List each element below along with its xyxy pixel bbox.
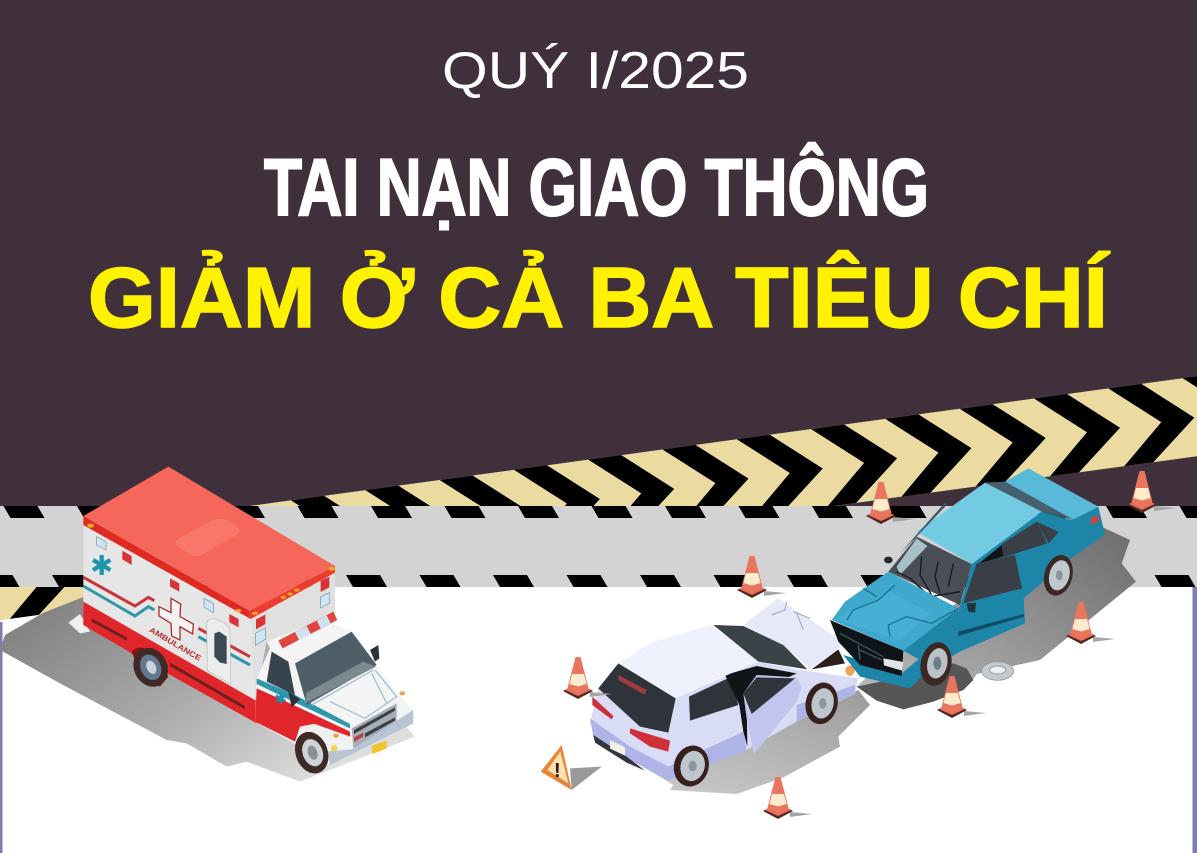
cab white base (255, 620, 413, 765)
small windows and lights (97, 537, 239, 627)
windshield (295, 632, 377, 705)
grille bars (840, 633, 883, 660)
tail lights (592, 697, 670, 752)
side window (267, 652, 295, 695)
open door (953, 555, 1025, 651)
ambulance body side (83, 525, 257, 722)
warning triangle (541, 745, 572, 790)
rear door (207, 619, 231, 684)
rear wheel (669, 742, 713, 790)
amber roof lights (87, 524, 335, 615)
icon: crashed blue car (830, 468, 1136, 709)
warning triangle shadow (570, 767, 602, 790)
roof (618, 625, 758, 697)
icon: traffic cones (563, 471, 1176, 819)
front wheel (289, 727, 334, 778)
fender (295, 724, 352, 763)
front wall lights (255, 577, 329, 645)
front lower teal lip (843, 655, 922, 688)
hood (832, 572, 958, 651)
grey road with black dashes (0, 506, 1197, 587)
headlight (883, 658, 903, 671)
engine dark gap (812, 649, 845, 669)
tail light (1091, 515, 1098, 525)
windshield (713, 625, 807, 669)
ambulance text: AMBULANCE (148, 625, 203, 663)
background: white lower ground (0, 587, 1197, 853)
front blackout (830, 620, 903, 676)
heading: yellow title line: GIẢM Ở CẢ BA TIÊU CHÍ (88, 250, 1110, 346)
side window (689, 677, 738, 721)
door window (743, 677, 795, 714)
roof hatch (175, 519, 240, 556)
dark front shadow (857, 663, 973, 709)
side stripes (83, 577, 250, 665)
cab teal stripe (257, 678, 350, 728)
rear window strip (985, 482, 1074, 520)
trunk (1005, 468, 1098, 520)
front wheel (802, 679, 842, 727)
blue car shadow (857, 520, 1136, 709)
front fender teal (903, 608, 960, 673)
white car body (590, 662, 858, 780)
roof (917, 483, 1042, 564)
rear bumper dark (593, 735, 645, 771)
windshield (888, 537, 972, 605)
amber markers (333, 691, 405, 738)
open door (743, 675, 802, 754)
front wheel (916, 639, 956, 689)
star of life (93, 555, 110, 575)
medical cross (159, 598, 193, 640)
roof eaves (83, 516, 251, 619)
chevron warning tape band (0, 366, 1197, 631)
licence plate (610, 740, 625, 756)
door window (214, 632, 227, 664)
ambulance roof (83, 467, 335, 611)
white car shadow (593, 690, 870, 794)
windshield cracks (897, 557, 960, 597)
blue car body side (960, 507, 1105, 652)
background: dark top panel (0, 0, 1197, 506)
ambulance cab (255, 612, 413, 765)
interior (977, 545, 1003, 565)
light bar (278, 612, 337, 648)
ambulance shadow (0, 597, 415, 782)
rear windows (1002, 522, 1059, 557)
front bumper (327, 710, 413, 765)
headlights (330, 705, 408, 753)
rear wheel (127, 642, 174, 693)
rear step (68, 614, 90, 633)
cab red door panel (255, 688, 350, 742)
far mirror (884, 557, 893, 563)
rear window (598, 663, 676, 733)
grille (352, 703, 397, 748)
heading: white title line: TAI NẠN GIAO THÔNG (264, 142, 929, 233)
hood lines (312, 670, 397, 718)
lower body stripe (590, 718, 747, 781)
ambulance red lower side (83, 602, 257, 723)
hood cracks (847, 585, 958, 637)
icon: ambulance (0, 467, 415, 782)
star on door (276, 693, 285, 704)
hubcap on the ground (982, 662, 1014, 680)
crumpled hood (743, 598, 845, 669)
orange indicator (845, 665, 855, 676)
rear wheel (1039, 552, 1077, 599)
licence plate (372, 741, 387, 754)
heading: period: QUÝ I/2025 (442, 42, 749, 100)
icon: crashed white car (541, 598, 870, 794)
A-pillar wiper (900, 503, 947, 553)
mirror (967, 603, 976, 613)
cabin interior (725, 666, 797, 747)
purple edge lines (0, 587, 1197, 853)
front wall of box (251, 573, 335, 700)
mirrors (288, 645, 379, 707)
warning triangle: ! (554, 759, 561, 782)
